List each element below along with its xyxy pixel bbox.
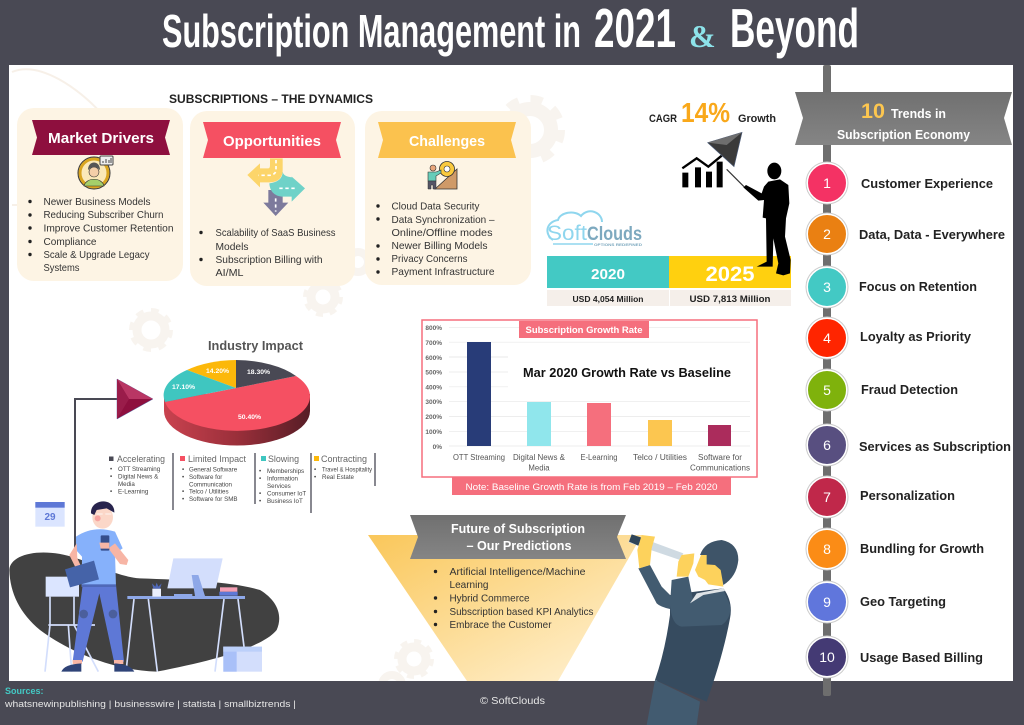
heading: industry impact: Industry Impact [208,339,304,353]
legend: accelerating: E-Learning [118,488,149,496]
text: opportunities list: Models [216,242,248,253]
legend: slowing: • [259,468,261,475]
bar chart: subscription growth rate: Telco / Utilities [633,453,687,462]
legend: slowing [259,453,311,513]
text: challenges list [376,202,495,278]
text: market drivers list: Newer Business Models [44,197,150,208]
trend 10: Usage Based Billing [860,651,983,665]
text: challenges list: Newer Billing Models [392,241,488,252]
legend: slowing: • [259,490,261,498]
icon: person in gear [78,156,113,189]
text: market drivers list: Reducing Subscriber Churn [44,210,164,221]
text: market drivers list: Scale & Upgrade Legacy [44,250,150,261]
trend 4: Loyalty as Priority [860,330,971,344]
panel: opportunities [190,111,355,286]
trend 7 [806,476,955,518]
legend: contracting [314,453,375,486]
trend 2: Data, Data - Everywhere [859,228,1005,242]
table: market size: USD 7,813 Million [690,294,770,304]
trend 3 [806,266,977,308]
text: predictions list: Hybrid Commerce [450,594,530,604]
legend: limited impact: • [182,466,184,474]
chair [45,577,98,672]
trend 10: 10 [819,649,835,665]
text: opportunities list: AI/ML [216,268,244,279]
desk [126,558,245,672]
illustration: person at desk [9,501,279,672]
legend: accelerating: • [110,466,112,473]
background gears [12,69,560,695]
legend: limited impact: Software for SMB [189,496,238,503]
chart title tag: Subscription Growth Rate [526,325,642,336]
trend 9: Geo Targeting [860,595,946,609]
text: market drivers list: Compliance [44,237,97,248]
logo: SoftClouds [547,211,642,247]
legend: limited impact: • [182,496,184,503]
bar chart: subscription growth rate: 200% [425,414,442,421]
legend: contracting: Travel & Hospitality [322,466,373,474]
banner: future of subscription: Future of Subscription [451,522,585,536]
trend 7: 7 [823,489,831,505]
legend: accelerating: Media [118,481,135,488]
title: Subscription Management in [162,5,581,57]
text: opportunities list [199,228,336,279]
bar chart: subscription growth rate: E-Learning [580,453,618,462]
bar chart: subscription growth rate [422,320,757,477]
table: market size: 2020 [591,266,625,283]
banner: opportunities [203,122,341,158]
bar chart: subscription growth rate: 700% [425,340,442,347]
trend 5: 5 [823,382,831,398]
bar chart: subscription growth rate: Software for [698,453,742,462]
text: market drivers list: Improve Customer Retention [44,224,174,234]
table: market size: 2025 [706,263,755,286]
banner: 10 trends: Trends in [891,107,946,121]
trend 9: 9 [823,594,831,610]
icon: road arrows [247,158,305,216]
bar chart: subscription growth rate: 100% [425,429,442,436]
bar chart: subscription growth rate: Digital News & [513,453,566,462]
table: market size: USD 4,054 Million [572,294,644,304]
text: predictions list: Learning [450,580,489,591]
trend 1: 1 [823,175,831,191]
icon: growth chart with arrow [682,132,742,187]
trend 2: 2 [823,226,831,242]
footer sources [4,686,296,710]
legend: limited impact: • [182,488,184,496]
legend: slowing: Memberships [267,468,304,475]
text: predictions list: Embrace the Customer [450,620,552,631]
trend 3: 3 [823,279,831,295]
text: challenges list: Online/Offline modes [392,228,492,239]
illustration: man with telescope [628,534,738,725]
legend: accelerating: Digital News & [118,474,159,480]
legend: limited impact: General Software [189,466,238,474]
spine of trends timeline [823,65,831,696]
legend: slowing: • [259,498,261,505]
text: challenges list: Payment Infrastructure [392,267,495,278]
text: opportunities list: Scalability of SaaS Business [216,228,336,239]
icon: presenter silhouette [727,163,791,275]
chart title tag [519,321,649,338]
table: market size [547,256,791,306]
trend 10 [806,636,983,678]
logo: SoftClouds: OPTIONS REDEFINED [594,243,642,247]
connector arrow [75,379,153,560]
banner: market drivers: Market Drivers [48,130,154,147]
legend: limited impact: Limited Impact [188,454,246,465]
footer copyright: © SoftClouds [480,696,545,707]
logo: SoftClouds: Soft [547,222,587,245]
text: predictions list: Artificial Intelligence/Machine [450,567,586,578]
bar chart: subscription growth rate: 300% [425,399,442,406]
icon: climbing to gear [428,162,457,189]
text: challenges list: Privacy Concerns [392,254,468,265]
pie chart: industry impact: 14.20% [206,368,229,375]
CAGR heading: CAGR [649,113,677,125]
trend 6 [806,424,1011,466]
pie chart: industry impact [164,360,310,446]
calendar icon [35,502,65,527]
trend 5: Fraud Detection [861,383,958,397]
legend: contracting: Real Estate [322,474,355,481]
banner: 10 trends: Subscription Economy [837,128,970,142]
text: challenges list: Cloud Data Security [392,202,480,212]
banner: future of subscription: – Our Predictions [466,539,572,553]
trend 4: 4 [823,330,831,346]
panel: challenges [365,111,531,285]
legend: slowing: Business IoT [267,498,303,505]
bar chart: subscription growth rate: 600% [425,355,442,362]
trend 6: Services as Subscription [859,440,1011,454]
legend: limited impact: Communication [189,482,233,488]
text: predictions list [434,567,594,631]
funnel: future predictions [368,535,642,681]
legend: contracting: Contracting [321,454,367,465]
CAGR heading [649,97,776,128]
trend 4 [806,317,971,359]
trend 1 [806,162,993,204]
legend: contracting: • [314,474,316,481]
legend: slowing: • [259,476,261,482]
bar chart: subscription growth rate: 500% [425,370,442,376]
bar chart: subscription growth rate: Media [528,464,550,472]
logo: SoftClouds: Clouds [587,224,642,245]
trend 9 [806,581,946,623]
legend: limited impact [180,453,255,504]
banner: challenges [378,122,516,158]
trend 2 [806,213,1005,255]
trend 8: Bundling for Growth [860,542,984,556]
footer sources: Sources: [5,686,44,696]
legend: accelerating: OTT Streaming [118,466,161,473]
banner: 10 trends: 10 [861,100,885,123]
footer sources: whatsnewinpublishing | businesswire | statista | smallbiztrends | [4,699,296,710]
bar chart: subscription growth rate: 400% [425,384,442,392]
pie chart: industry impact: 50.40% [238,414,261,421]
trend 3: Focus on Retention [859,280,977,294]
banner: market drivers [32,120,170,155]
calendar icon: 29 [44,512,56,523]
trend 7: Personalization [860,489,955,503]
trend 5 [806,369,958,411]
text: market drivers list: Systems [44,263,80,274]
blob background [9,552,279,672]
legend: limited impact: • [182,474,184,481]
trend 1: Customer Experience [861,177,993,191]
chart heading: Mar 2020 Growth Rate vs Baseline [523,365,731,380]
bar chart: subscription growth rate: 0% [433,444,442,451]
text: market drivers list [28,197,174,274]
bar chart: subscription growth rate: OTT Streaming [453,453,505,462]
legend: accelerating [109,453,173,510]
CAGR heading: Growth [738,113,776,125]
legend: slowing: Consumer IoT [267,490,306,498]
legend: limited impact: Software for [189,474,222,481]
text: opportunities list: Subscription Billing with [216,255,323,266]
legend: slowing: Services [267,483,291,490]
CAGR heading: 14% [681,97,730,128]
note: baseline: Note: Baseline Growth Rate is from Feb 2019 – Feb 2020 [466,482,718,493]
bar chart: subscription growth rate: 800% [425,325,442,332]
banner: opportunities: Opportunities [223,133,321,150]
heading: subscriptions dynamics: SUBSCRIPTIONS – THE DYNAMICS [169,92,373,106]
note: baseline [452,477,731,495]
legend: accelerating: • [110,474,112,480]
trend 6: 6 [823,437,831,453]
person [61,501,134,672]
trend 8 [806,528,984,570]
text: challenges list: Data Synchronization – [392,215,495,226]
banner: 10 trends [795,92,1012,145]
title: & [689,18,716,54]
legend: accelerating: • [110,488,112,496]
footer band [0,681,1024,725]
legend: limited impact: Telco / Utilities [189,488,229,496]
banner: challenges: Challenges [409,133,485,150]
pie chart: industry impact: 17.10% [172,384,195,391]
text: predictions list: Subscription based KPI Analytics [450,607,594,618]
bar chart: subscription growth rate: Communications [690,464,750,472]
legend: accelerating: Accelerating [117,454,165,465]
banner: future of subscription [410,515,626,559]
legend: contracting: • [314,466,316,474]
panel: market drivers [17,108,183,281]
box [223,647,262,672]
legend: slowing: Slowing [268,454,299,465]
legend: slowing: Information [267,476,299,482]
trend 8: 8 [823,541,831,557]
pie chart: industry impact: 18.30% [247,369,270,376]
